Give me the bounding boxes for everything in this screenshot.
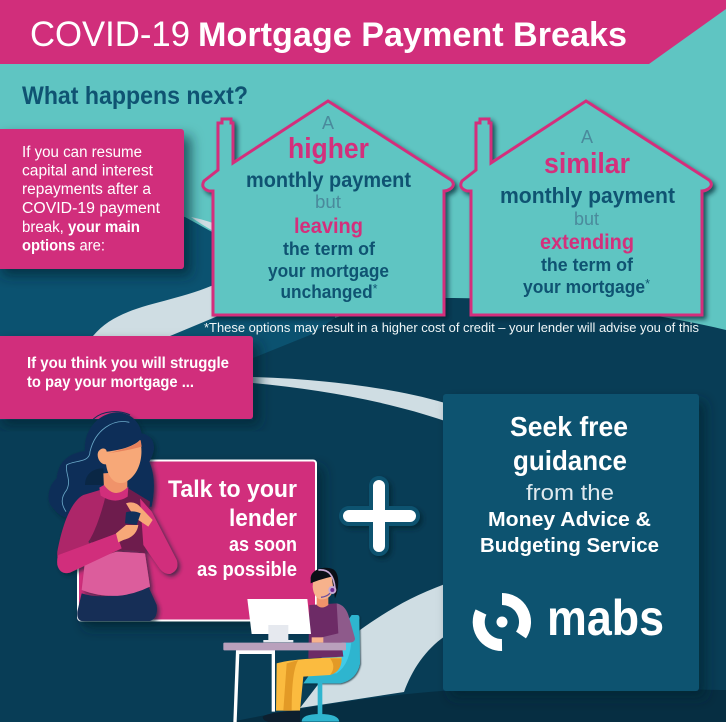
house: similar monthly payment — [461, 101, 711, 315]
panel: seek free guidance: Budgeting Service — [480, 535, 659, 557]
panel: main options: options are: — [22, 238, 105, 254]
house: higher monthly payment: leaving — [294, 215, 363, 238]
house: higher monthly payment: your mortgage — [268, 261, 389, 281]
house: similar monthly payment: A — [581, 127, 593, 147]
house: higher monthly payment: unchanged — [280, 282, 377, 302]
panel: talk to your lender: lender — [229, 505, 297, 532]
house: higher monthly payment: A — [322, 113, 334, 133]
panel: seek free guidance — [443, 394, 699, 691]
panel: main options: break, your main — [22, 219, 140, 236]
panel: if you struggle: to pay your mortgage ... — [27, 374, 194, 391]
house: higher monthly payment: monthly payment — [246, 169, 411, 192]
house: similar monthly payment: the term of — [541, 255, 634, 275]
house: similar monthly payment: extending — [540, 231, 634, 254]
logo: mabs: mabs — [547, 590, 664, 646]
panel: seek free guidance: Seek free — [510, 411, 628, 442]
panel: talk to your lender: as possible — [197, 559, 297, 581]
house: similar monthly payment: monthly payment — [500, 183, 676, 208]
illustration: woman with phone — [49, 412, 177, 621]
house: higher monthly payment: * — [373, 281, 378, 296]
title banner: COVID-19 — [30, 15, 190, 54]
panel: main options: If you can resume — [22, 144, 142, 161]
house: higher monthly payment — [203, 101, 453, 315]
panel: main options: repayments after a — [22, 181, 151, 198]
panel: if you struggle: If you think you will struggle — [27, 355, 229, 372]
panel: if you struggle — [0, 336, 253, 419]
panel: talk to your lender: as soon — [229, 534, 297, 556]
panel: talk to your lender: Talk to your — [168, 476, 297, 503]
panel: main options — [0, 129, 184, 269]
footnote: *These options may result in a higher cost of credit – your lender will advise you of this — [204, 320, 699, 335]
panel: seek free guidance: guidance — [513, 445, 627, 476]
heading: what happens next: What happens next? — [22, 82, 248, 110]
title banner — [0, 0, 726, 64]
icon: plus sign — [343, 480, 416, 552]
title banner: Mortgage Payment Breaks — [198, 16, 627, 54]
house: higher monthly payment: but — [315, 192, 341, 212]
panel: main options: COVID-19 payment — [22, 200, 161, 217]
house: similar monthly payment: similar — [544, 148, 630, 180]
house: similar monthly payment: your mortgage — [523, 277, 649, 297]
house: higher monthly payment: the term of — [283, 239, 376, 259]
panel: seek free guidance: Money Advice & — [488, 509, 651, 531]
logo: mabs — [479, 590, 664, 646]
house: similar monthly payment: but — [574, 209, 599, 229]
panel: main options: capital and interest — [22, 162, 154, 180]
house: higher monthly payment: higher — [288, 133, 369, 165]
panel: talk to your lender — [78, 460, 316, 620]
house: similar monthly payment: * — [645, 276, 650, 291]
panel: seek free guidance: from the — [526, 480, 614, 505]
illustration: adviser at desk — [223, 568, 360, 722]
